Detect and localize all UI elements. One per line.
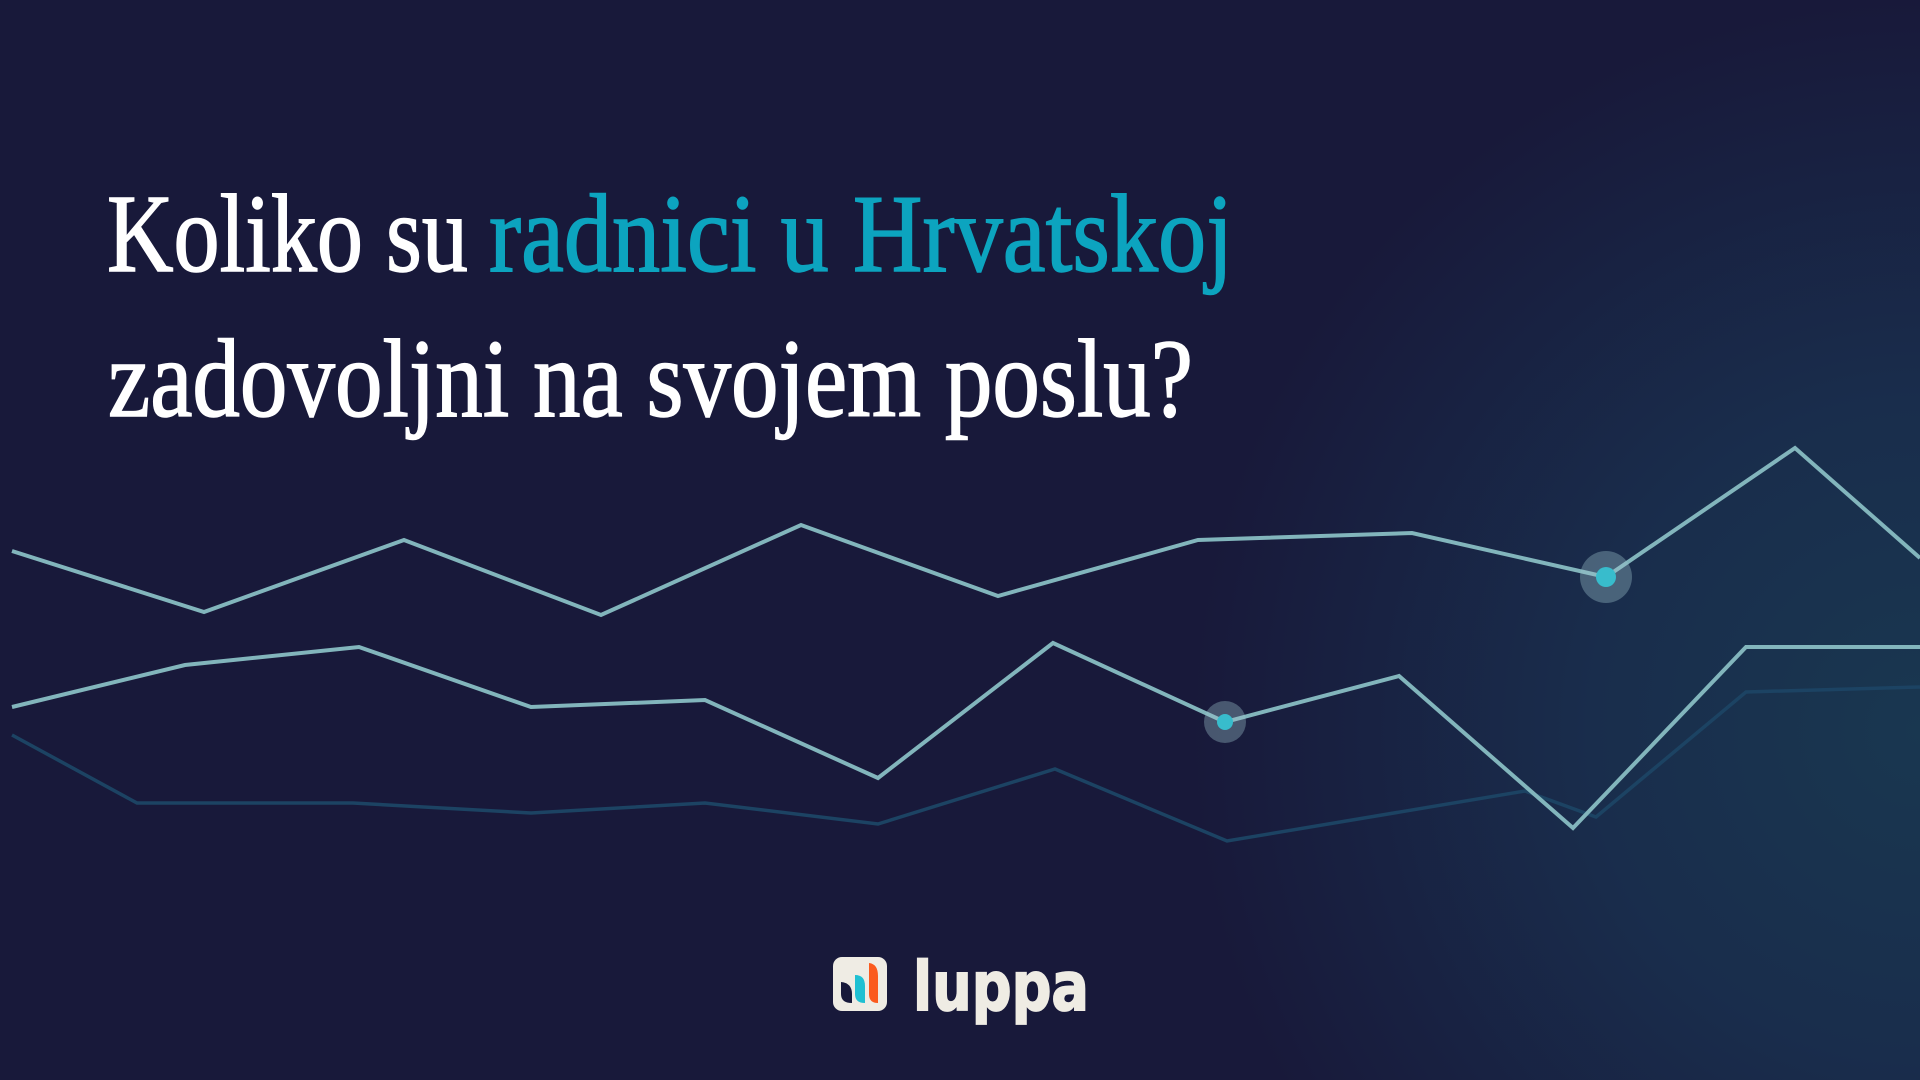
line chart — [12, 448, 1920, 841]
middle data line — [12, 643, 1920, 828]
marker: middle line — [1204, 701, 1246, 743]
title: zadovoljni na svojem poslu? — [108, 318, 1193, 441]
icon: bar chart logo mark — [833, 957, 887, 1011]
logo — [833, 948, 1089, 1027]
upper data line — [12, 448, 1920, 615]
title — [107, 173, 1233, 441]
marker: upper line — [1580, 551, 1632, 603]
title: Koliko su — [107, 173, 468, 296]
title: radnici u Hrvatskoj — [489, 173, 1233, 296]
dim data line — [12, 687, 1920, 841]
wordmark: luppa — [913, 948, 1089, 1027]
